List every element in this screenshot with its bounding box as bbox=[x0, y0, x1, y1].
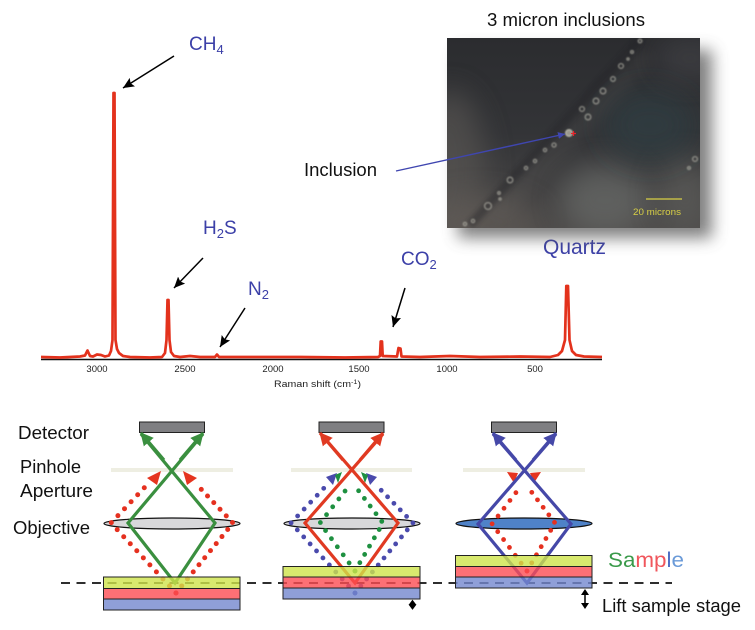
out-of-focus red dots bbox=[111, 487, 233, 593]
axis tick labels: 2000 bbox=[262, 364, 284, 375]
scale label: 20 microns bbox=[633, 207, 681, 218]
axis tick labels: 1000 bbox=[436, 364, 458, 375]
label: CH4: CH bbox=[189, 34, 216, 55]
sample layers bbox=[104, 577, 240, 610]
objective lens bbox=[284, 518, 420, 529]
detector bbox=[140, 422, 204, 432]
objective lens bbox=[456, 518, 592, 529]
label: Lift sample stage: Lift sample stage bbox=[602, 596, 741, 616]
label: Quartz: Quartz bbox=[543, 236, 606, 259]
label: CO2: 2 bbox=[430, 257, 437, 272]
label: Aperture: Aperture bbox=[20, 481, 93, 501]
diagram: middle, focus on centre layer bbox=[283, 422, 420, 609]
label: CH4: 4 bbox=[216, 42, 224, 57]
label: N2: 2 bbox=[262, 287, 269, 302]
label: Pinhole: Pinhole bbox=[20, 457, 81, 477]
blue focused beam bbox=[478, 434, 571, 583]
label: N2: N bbox=[248, 279, 262, 300]
label: N2 bbox=[248, 279, 269, 302]
lift arrow bbox=[581, 589, 589, 609]
photo drop shadow bbox=[458, 50, 712, 238]
panel: Raman spectrum bbox=[41, 93, 602, 390]
arrow: to CH4 peak bbox=[123, 56, 174, 88]
objective lens bbox=[104, 518, 240, 529]
red arrowheads at pinhole bbox=[147, 471, 197, 485]
pinhole aperture bbox=[291, 468, 412, 472]
axis title: Raman shift (cm bbox=[274, 379, 343, 390]
detector bbox=[319, 422, 384, 432]
arrow: to H2S peak bbox=[174, 258, 203, 288]
detector bbox=[492, 422, 556, 432]
axis tick labels: 1500 bbox=[348, 364, 370, 375]
red out-of-focus dots bbox=[492, 486, 555, 571]
small stage lift arrow bbox=[410, 600, 416, 609]
axis tick labels: 500 bbox=[527, 364, 543, 375]
spectrum trace bbox=[41, 93, 602, 358]
blue and green arrowheads bbox=[326, 473, 377, 485]
diagram: left, focus on top layer bbox=[104, 422, 240, 610]
focal plane dashed line bbox=[61, 582, 672, 584]
label: CO2: CO bbox=[401, 249, 430, 270]
sample layers bbox=[283, 566, 420, 599]
axis title: -1 bbox=[351, 379, 358, 386]
diagram: right, focus on bottom layer bbox=[456, 422, 592, 609]
arrow: to N2 peak bbox=[220, 308, 245, 347]
blue out-of-focus dots bbox=[291, 487, 413, 593]
label: H2S: S bbox=[224, 218, 237, 239]
axis tick labels: 2500 bbox=[174, 364, 196, 375]
green focused beam bbox=[128, 434, 215, 583]
axis title: ) bbox=[357, 379, 361, 390]
pinhole aperture bbox=[463, 468, 585, 472]
x axis line bbox=[41, 358, 602, 360]
green out-of-focus dots bbox=[320, 486, 383, 571]
pinhole aperture bbox=[111, 468, 233, 472]
axis tick labels: 3000 bbox=[86, 364, 108, 375]
panel: quartz micrograph bbox=[446, 38, 724, 250]
label: Objective: Objective bbox=[13, 518, 90, 538]
scale bar bbox=[646, 198, 682, 200]
label: H2S bbox=[203, 218, 237, 241]
red arrowheads bbox=[507, 472, 541, 483]
red focused beam bbox=[305, 434, 398, 583]
label: Inclusion: Inclusion bbox=[304, 160, 377, 180]
arrow: to CO2 peak bbox=[393, 288, 405, 327]
axis tick labels bbox=[86, 364, 543, 375]
label: Sample (multi-coloured): Sample bbox=[608, 549, 684, 572]
heading: 3 micron inclusions: 3 micron inclusions bbox=[487, 10, 645, 30]
inclusions bbox=[463, 39, 697, 226]
label: H2S: H bbox=[203, 218, 217, 239]
label: H2S: 2 bbox=[217, 226, 224, 241]
arrow: to inclusion bbox=[396, 134, 565, 171]
sample layers bbox=[456, 556, 592, 588]
label: Detector: Detector bbox=[18, 423, 89, 443]
target inclusion with marker bbox=[566, 130, 572, 136]
